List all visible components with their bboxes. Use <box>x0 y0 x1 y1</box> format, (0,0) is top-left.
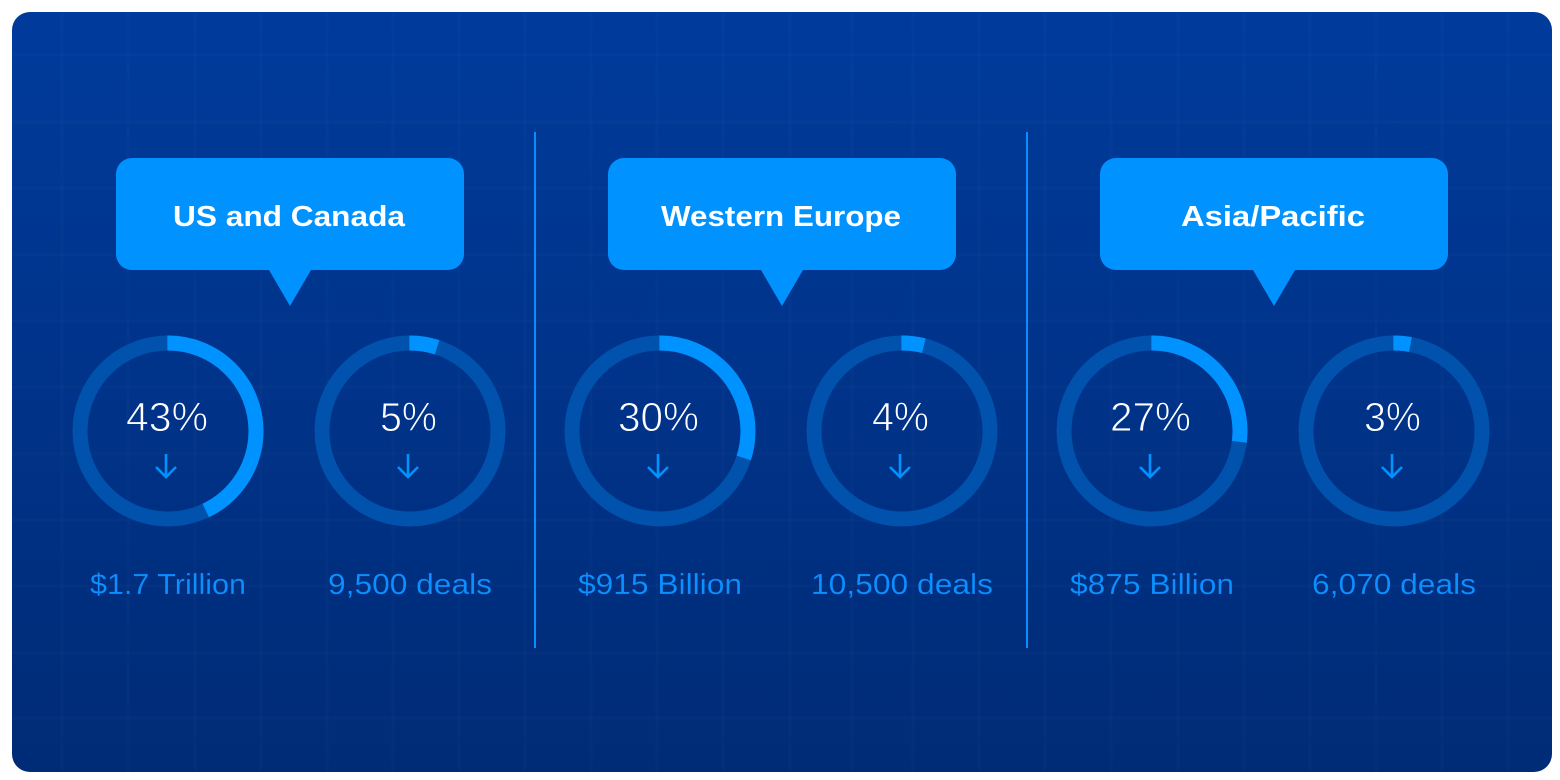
label: $875 Billion: $875 Billion <box>1070 569 1234 601</box>
callout: US and Canada <box>116 158 464 306</box>
donut: 5% <box>322 343 498 519</box>
donut: 3% <box>1306 343 1482 519</box>
divider: left <box>534 132 536 648</box>
donut: 5%: 5% <box>380 394 437 440</box>
donut: 27%: 27% <box>1110 394 1191 440</box>
donut: 3%: 3% <box>1364 394 1421 440</box>
label: $1.7 Trillion: $1.7 Trillion <box>90 569 246 601</box>
donut: 43%: 43% <box>126 394 208 440</box>
label: 9,500 deals: 9,500 deals <box>328 569 492 601</box>
donut: 4%: 4% <box>872 394 929 440</box>
label: 10,500 deals: 10,500 deals <box>811 569 993 601</box>
donut: 30%: 30% <box>618 394 699 440</box>
callout: US and Canada: US and Canada <box>173 201 406 233</box>
panel: Western Europe <box>572 158 993 601</box>
callout: Asia/Pacific <box>1100 158 1448 306</box>
label: 6,070 deals: 6,070 deals <box>1312 569 1476 601</box>
label: $915 Billion: $915 Billion <box>578 569 742 601</box>
donut: 30% <box>572 343 748 519</box>
donut: 4% <box>814 343 990 519</box>
panel: US and Canada <box>80 158 498 601</box>
divider: right <box>1026 132 1028 648</box>
callout: Western Europe <box>608 158 956 306</box>
callout: Asia/Pacific: Asia/Pacific <box>1181 201 1365 233</box>
callout: Western Europe: Western Europe <box>661 201 901 233</box>
donut: 43% <box>80 343 256 519</box>
panel: Asia/Pacific <box>1064 158 1482 601</box>
donut: 27% <box>1064 343 1240 519</box>
